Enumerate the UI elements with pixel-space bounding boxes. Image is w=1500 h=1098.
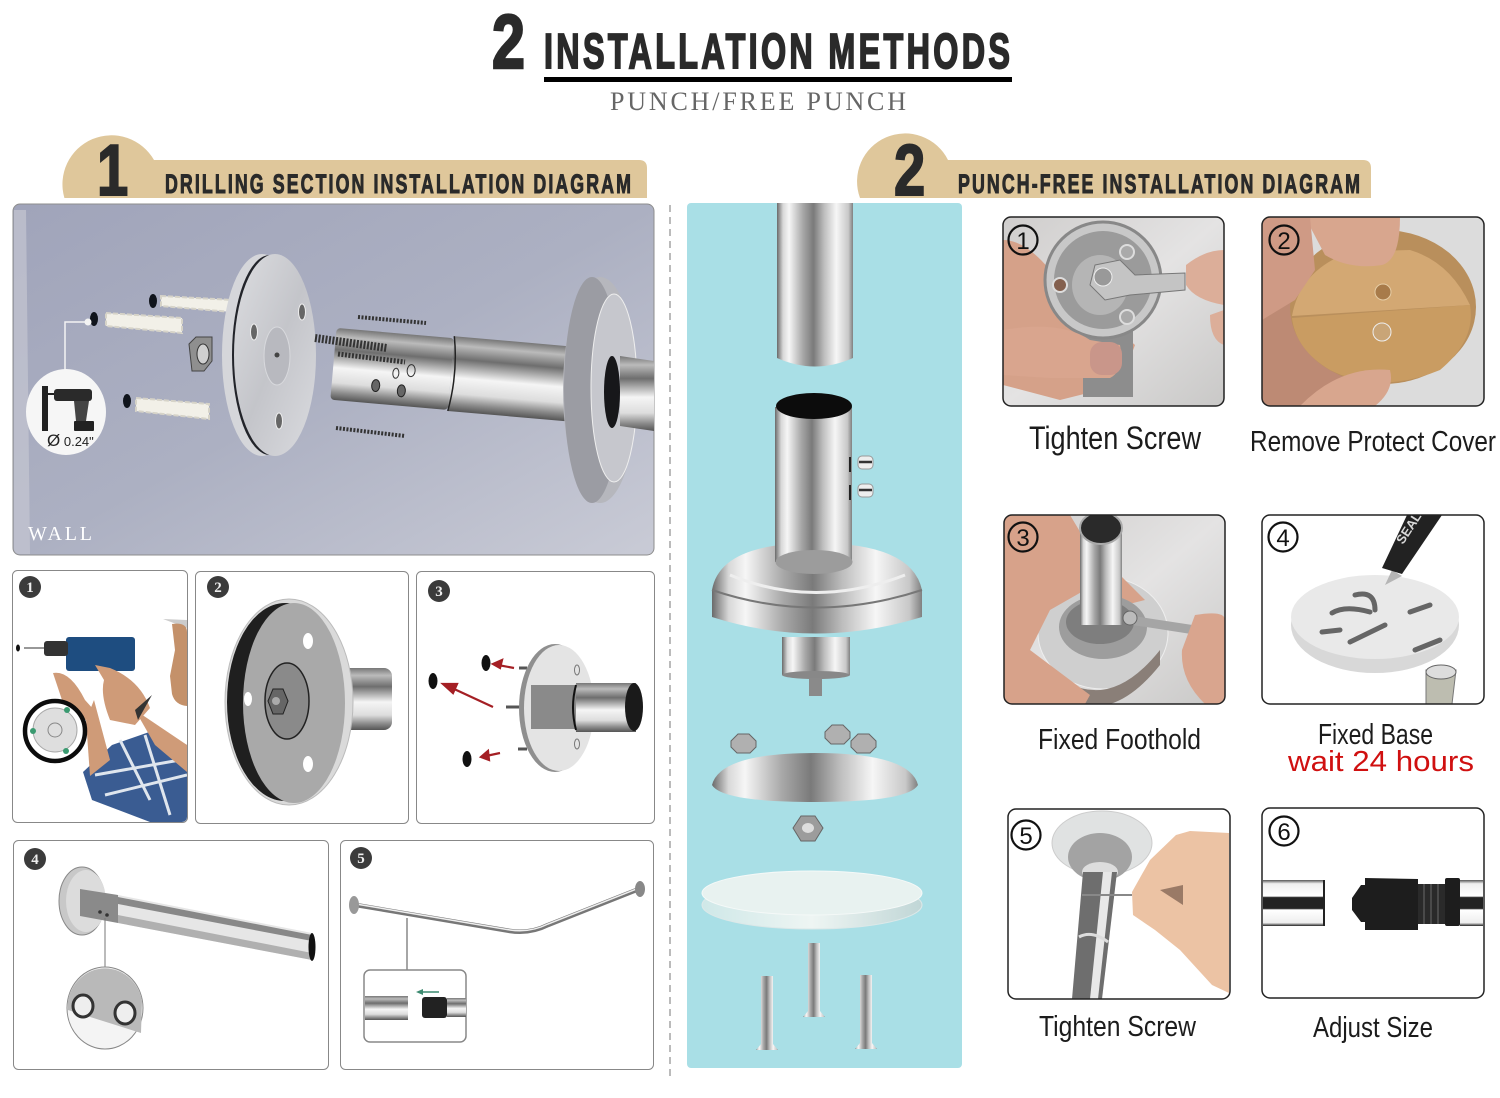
panel: step 3 mount flange to wall: 3 — [435, 584, 443, 600]
step: fixed foothold photo 3 — [1004, 512, 1225, 707]
icon: drill callout: Ø 0.24" — [47, 431, 94, 450]
panel: step 5 curved rod: 5 — [357, 851, 365, 867]
wall holes — [90, 294, 157, 408]
heading: punch-free banner: 2 — [894, 130, 925, 211]
heading: punch-free banner: PUNCH-FREE INSTALLATION DIAGRAM — [958, 168, 1360, 199]
panel: step 1 drill — [12, 570, 188, 822]
arrows: red — [443, 660, 514, 760]
title: 2 — [492, 0, 525, 85]
nuts and cap — [712, 725, 918, 841]
caption: tighten screw: Tighten Screw — [1029, 420, 1202, 456]
panel: exploded punch-free pole — [687, 203, 962, 1068]
panel: step 3 mount flange to wall — [416, 572, 654, 824]
screws — [315, 317, 426, 436]
caption: tighten screw: Tighten Screw — [1039, 1011, 1197, 1043]
step: tighten screw photo 1 — [1003, 217, 1224, 406]
rod and tube — [330, 326, 574, 421]
panel: step 4 rod: 4 — [31, 852, 39, 868]
subtitle: PUNCH/FREE PUNCH — [610, 87, 906, 116]
icon: drill callout — [26, 318, 106, 455]
panel: step 4 rod — [14, 840, 328, 1070]
step: glue on base photo 4 — [1262, 509, 1484, 704]
panel: step 2 flange: 2 — [214, 580, 222, 596]
wall plate and nut — [189, 254, 316, 456]
title: INSTALLATION METHODS — [544, 23, 1010, 79]
heading: punch-free banner — [857, 130, 1371, 211]
lower tube and base — [712, 393, 922, 696]
clear acrylic base — [702, 871, 922, 929]
heading: drilling section banner: 1 — [97, 130, 128, 211]
title — [492, 0, 1012, 85]
caption: fixed foothold: Fixed Foothold — [1038, 724, 1201, 756]
caption: fixed base: Fixed Base — [1318, 719, 1433, 751]
upper tube — [777, 203, 853, 366]
step: tighten screw photo 5 — [1008, 809, 1230, 999]
panel: step 5 curved rod — [340, 840, 654, 1070]
wall anchors — [106, 296, 232, 419]
heading: drilling section banner — [62, 130, 647, 211]
screws — [756, 943, 877, 1050]
step: glue on base photo 4: 4 — [1276, 525, 1290, 552]
step: adjust size photo 6 — [1262, 808, 1484, 998]
panel: exploded wall diagram — [13, 204, 654, 555]
panel: step 1 drill: 1 — [26, 580, 34, 596]
panel: step 2 flange — [196, 572, 408, 824]
step: adjust size photo 6: 6 — [1277, 819, 1291, 846]
flange and end of rod — [563, 277, 654, 503]
caption: adjust size: Adjust Size — [1313, 1012, 1433, 1044]
step: tighten screw photo 5: 5 — [1019, 823, 1033, 850]
heading: drilling section banner: DRILLING SECTION INSTALLATION DIAGRAM — [165, 168, 631, 199]
step: remove protect cover photo 2: 2 — [1277, 228, 1291, 255]
caption: wait 24 hours: wait 24 hours — [1287, 746, 1474, 778]
step: glue on base photo 4: SEAL — [1393, 509, 1424, 547]
step: remove protect cover photo 2 — [1262, 217, 1484, 406]
step: tighten screw photo 1: 1 — [1016, 228, 1030, 255]
label: wall: WALL — [28, 523, 92, 545]
step: fixed foothold photo 3: 3 — [1016, 525, 1030, 552]
